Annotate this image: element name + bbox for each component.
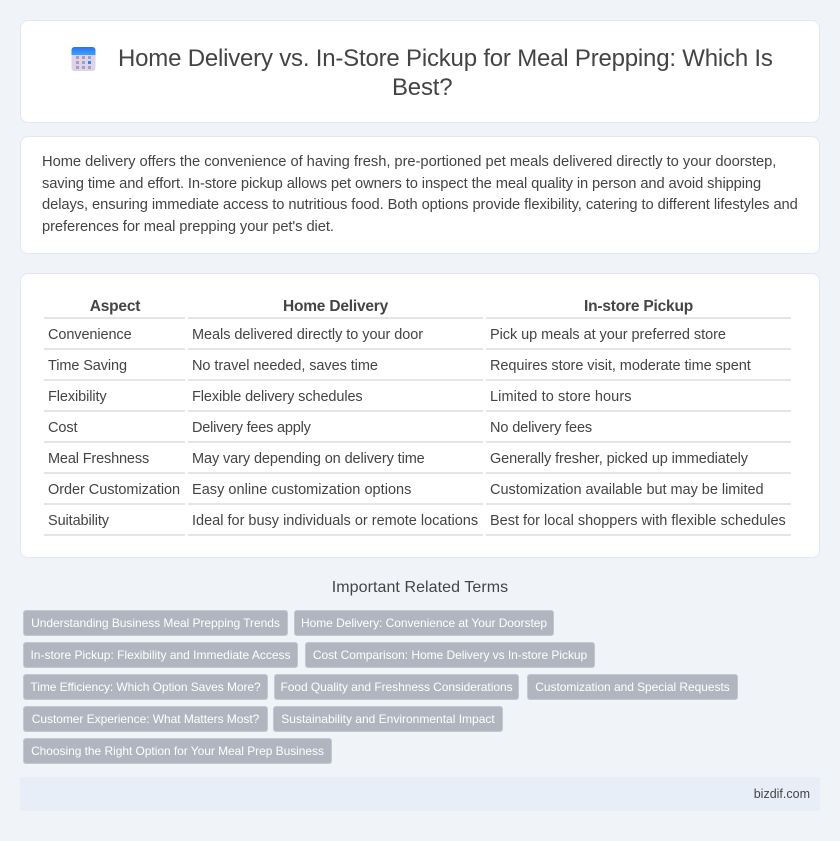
tag: [23, 642, 298, 668]
row: order customization: [48, 482, 764, 498]
row: cost: Delivery fees apply: [192, 420, 311, 436]
tag: Customization and Special Requests: [535, 680, 730, 694]
row: order customization: Order Customization: [48, 482, 180, 498]
footer bar: [20, 777, 820, 811]
tag: In-store Pickup: Flexibility and Immediate Access: [30, 648, 291, 662]
row: suitability: Suitability: [48, 513, 109, 529]
related term tags: [23, 610, 738, 764]
row: time saving: [48, 358, 751, 374]
tag: [305, 642, 595, 668]
icon: calendar: [72, 47, 96, 71]
row: flexibility: Flexibility: [48, 389, 107, 405]
tag: [23, 706, 268, 732]
row: cost: [48, 420, 592, 436]
row: meal freshness: Meal Freshness: [48, 451, 149, 467]
row: time saving: Requires store visit, moderate time spent: [490, 358, 751, 374]
row: meal freshness: Generally fresher, picked up immediately: [490, 451, 748, 467]
row: cost: Cost: [48, 420, 77, 436]
title: Best?: [392, 74, 452, 101]
tag: Home Delivery: Convenience at Your Doorstep: [301, 616, 547, 630]
title: Home Delivery vs. In-Store Pickup for Meal Prepping: Which Is: [118, 45, 773, 72]
tag: Cost Comparison: Home Delivery vs In-store Pickup: [313, 648, 587, 662]
tag: [23, 674, 268, 700]
tag: Time Efficiency: Which Option Saves More?: [30, 680, 261, 694]
row: time saving: Time Saving: [48, 358, 127, 374]
heading: important related terms: Important Related Terms: [332, 579, 508, 596]
tag: [23, 610, 288, 636]
tag: [273, 706, 503, 732]
tag: [274, 674, 519, 700]
panel: title header: [20, 20, 820, 123]
row: flexibility: [48, 389, 632, 405]
panel: intro text: [20, 136, 820, 254]
intro paragraph: saving time and effort. In-store pickup allows pet owners to inspect the meal quality in person and avoid shipping: [42, 176, 761, 192]
row: meal freshness: May vary depending on delivery time: [192, 451, 425, 467]
intro paragraph: delays, ensuring immediate access to nutritious food. Both options provide flexibility, catering to different lifestyles and: [42, 197, 798, 213]
table header: [90, 298, 693, 315]
table header: Home Delivery: [283, 298, 388, 315]
tag: Customer Experience: What Matters Most?: [32, 712, 259, 726]
row: time saving: No travel needed, saves time: [192, 358, 378, 374]
tag: [294, 610, 554, 636]
row: order customization: Customization available but may be limited: [490, 482, 764, 498]
row: convenience: [48, 327, 726, 343]
intro paragraph: Home delivery offers the convenience of having fresh, pre-portioned pet meals delivered directly to your doorstep,: [42, 154, 776, 170]
row: meal freshness: [48, 451, 748, 467]
title: [118, 45, 773, 101]
row: cost: No delivery fees: [490, 420, 592, 436]
row: flexibility: Limited to store hours: [490, 389, 632, 405]
row: convenience: Convenience: [48, 327, 132, 343]
table header: Aspect: [90, 298, 140, 315]
row: convenience: Pick up meals at your preferred store: [490, 327, 726, 343]
tag: Sustainability and Environmental Impact: [281, 712, 495, 726]
row: suitability: [48, 513, 786, 529]
row: convenience: Meals delivered directly to your door: [192, 327, 423, 343]
row: flexibility: Flexible delivery schedules: [192, 389, 363, 405]
panel: comparison table: [20, 273, 820, 558]
tag: Understanding Business Meal Prepping Trends: [31, 616, 280, 630]
row: order customization: Easy online customization options: [192, 482, 411, 498]
row: suitability: Ideal for busy individuals or remote locations: [192, 513, 478, 529]
intro paragraph: [42, 154, 798, 234]
tag: [527, 674, 738, 700]
tag: Choosing the Right Option for Your Meal Prep Business: [31, 744, 324, 758]
intro paragraph: preferences for meal prepping your pet's diet.: [42, 218, 334, 234]
tag: Food Quality and Freshness Considerations: [280, 680, 513, 694]
row: suitability: Best for local shoppers with flexible schedules: [490, 513, 786, 529]
table header: In-store Pickup: [584, 298, 693, 315]
footer site name: bizdif.com: [754, 787, 810, 801]
tag: [23, 738, 332, 764]
